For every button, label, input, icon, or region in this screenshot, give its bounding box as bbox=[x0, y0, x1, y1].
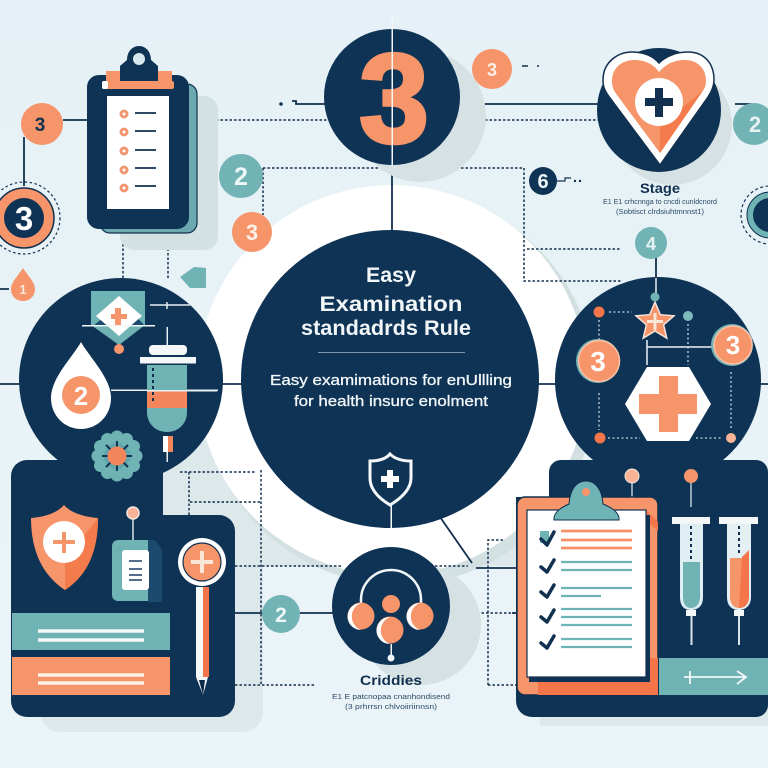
badge: 6 bbox=[529, 167, 581, 195]
icon: pennant bbox=[82, 291, 190, 354]
coin: 3 right: 3 bbox=[726, 330, 740, 360]
label: stage: (Sobtisct clrdsiuhtmnnst1) bbox=[616, 209, 704, 216]
bar: teal bbox=[12, 613, 170, 650]
bar: orange bbox=[12, 657, 170, 695]
check marks bbox=[541, 532, 554, 648]
text lines bbox=[561, 531, 632, 548]
badge: ringed 3: 3 bbox=[15, 200, 33, 237]
label: stage: E1 E1 crhcnnga to cncdi cunldcnord bbox=[603, 199, 717, 206]
label: criddies: E1 E patcnopaa cnanhondisend bbox=[332, 694, 450, 701]
badge: teal 2 right: 2 bbox=[749, 112, 761, 137]
badge: orange 3 centre left bbox=[232, 212, 272, 252]
checklist bullets bbox=[121, 111, 127, 191]
big number circle: 3 bbox=[359, 28, 429, 169]
badge: teal 4 bbox=[635, 227, 667, 259]
badge: teal 2 bottom: 2 bbox=[275, 604, 287, 627]
icon: hexagon cross bbox=[625, 367, 711, 441]
connector dots bbox=[599, 312, 731, 438]
panel: left circle and lower panel bbox=[11, 278, 235, 717]
coin: 3 left bbox=[576, 339, 620, 383]
badge: orange 3 top bbox=[472, 49, 512, 89]
coin: 3 right bbox=[711, 324, 753, 366]
icon: syringe orange bbox=[719, 517, 758, 645]
badge: orange 3 top: 3 bbox=[487, 60, 497, 80]
badge: ringed right edge bbox=[741, 186, 768, 244]
subtitle bbox=[270, 372, 512, 410]
badge: teal 2 bbox=[219, 154, 263, 198]
icon: heart circle bbox=[597, 48, 732, 185]
icon: star bbox=[636, 302, 674, 338]
icon: nodes bbox=[348, 595, 434, 644]
badge: 6: 6 bbox=[537, 171, 549, 193]
panel: right circle and lower panel bbox=[516, 277, 768, 717]
label: criddies bbox=[332, 672, 450, 711]
drop: 1 bbox=[11, 268, 35, 301]
label: criddies: (3 prhrrsn chlvoiiriinnsn) bbox=[345, 704, 437, 711]
icon: teal marker bbox=[180, 267, 206, 288]
clip bbox=[554, 481, 619, 520]
title: Easy bbox=[366, 264, 416, 287]
badge: orange 3 bbox=[21, 103, 63, 145]
icon: drop 2 bbox=[51, 342, 218, 429]
drop: 1: 1 bbox=[19, 282, 27, 297]
label: criddies: Criddies bbox=[360, 672, 422, 688]
badge: teal 2 right bbox=[733, 103, 768, 145]
icon: drop 2: 2 bbox=[74, 381, 88, 411]
badge: ringed 3 bbox=[0, 182, 60, 254]
label: stage: Stage bbox=[640, 180, 680, 196]
title bbox=[301, 264, 471, 340]
subtitle: Easy examimations for enUllling bbox=[270, 372, 512, 389]
subtitle: for health insurc enolment bbox=[294, 393, 489, 410]
title: Examination bbox=[320, 293, 462, 316]
clipboard checklist bbox=[517, 481, 658, 695]
label: stage bbox=[603, 180, 717, 216]
badge: orange 3 centre left: 3 bbox=[246, 220, 258, 245]
icon: syringe bbox=[140, 327, 217, 462]
pins bbox=[625, 469, 698, 507]
badge: teal 2: 2 bbox=[234, 163, 248, 191]
badge: teal 2 bottom bbox=[262, 595, 300, 633]
title: standadrds Rule bbox=[301, 317, 471, 340]
panel: clipboard top left bbox=[87, 46, 218, 250]
panel: bottom centre circle bbox=[332, 547, 481, 685]
badge: orange 3: 3 bbox=[35, 115, 45, 136]
big number circle bbox=[279, 15, 486, 182]
icon: medical tag bbox=[112, 507, 162, 602]
icon: flower bbox=[92, 430, 142, 482]
icon: orange shield bbox=[31, 505, 98, 590]
badge: teal 4: 4 bbox=[646, 234, 656, 254]
bar: teal arrow bbox=[659, 658, 768, 695]
central circle with title bbox=[241, 230, 539, 528]
coin: 3 left: 3 bbox=[590, 346, 606, 377]
icon: shield bbox=[370, 454, 411, 528]
icon: magnifier bbox=[178, 538, 226, 695]
icon: syringe teal bbox=[672, 517, 710, 645]
